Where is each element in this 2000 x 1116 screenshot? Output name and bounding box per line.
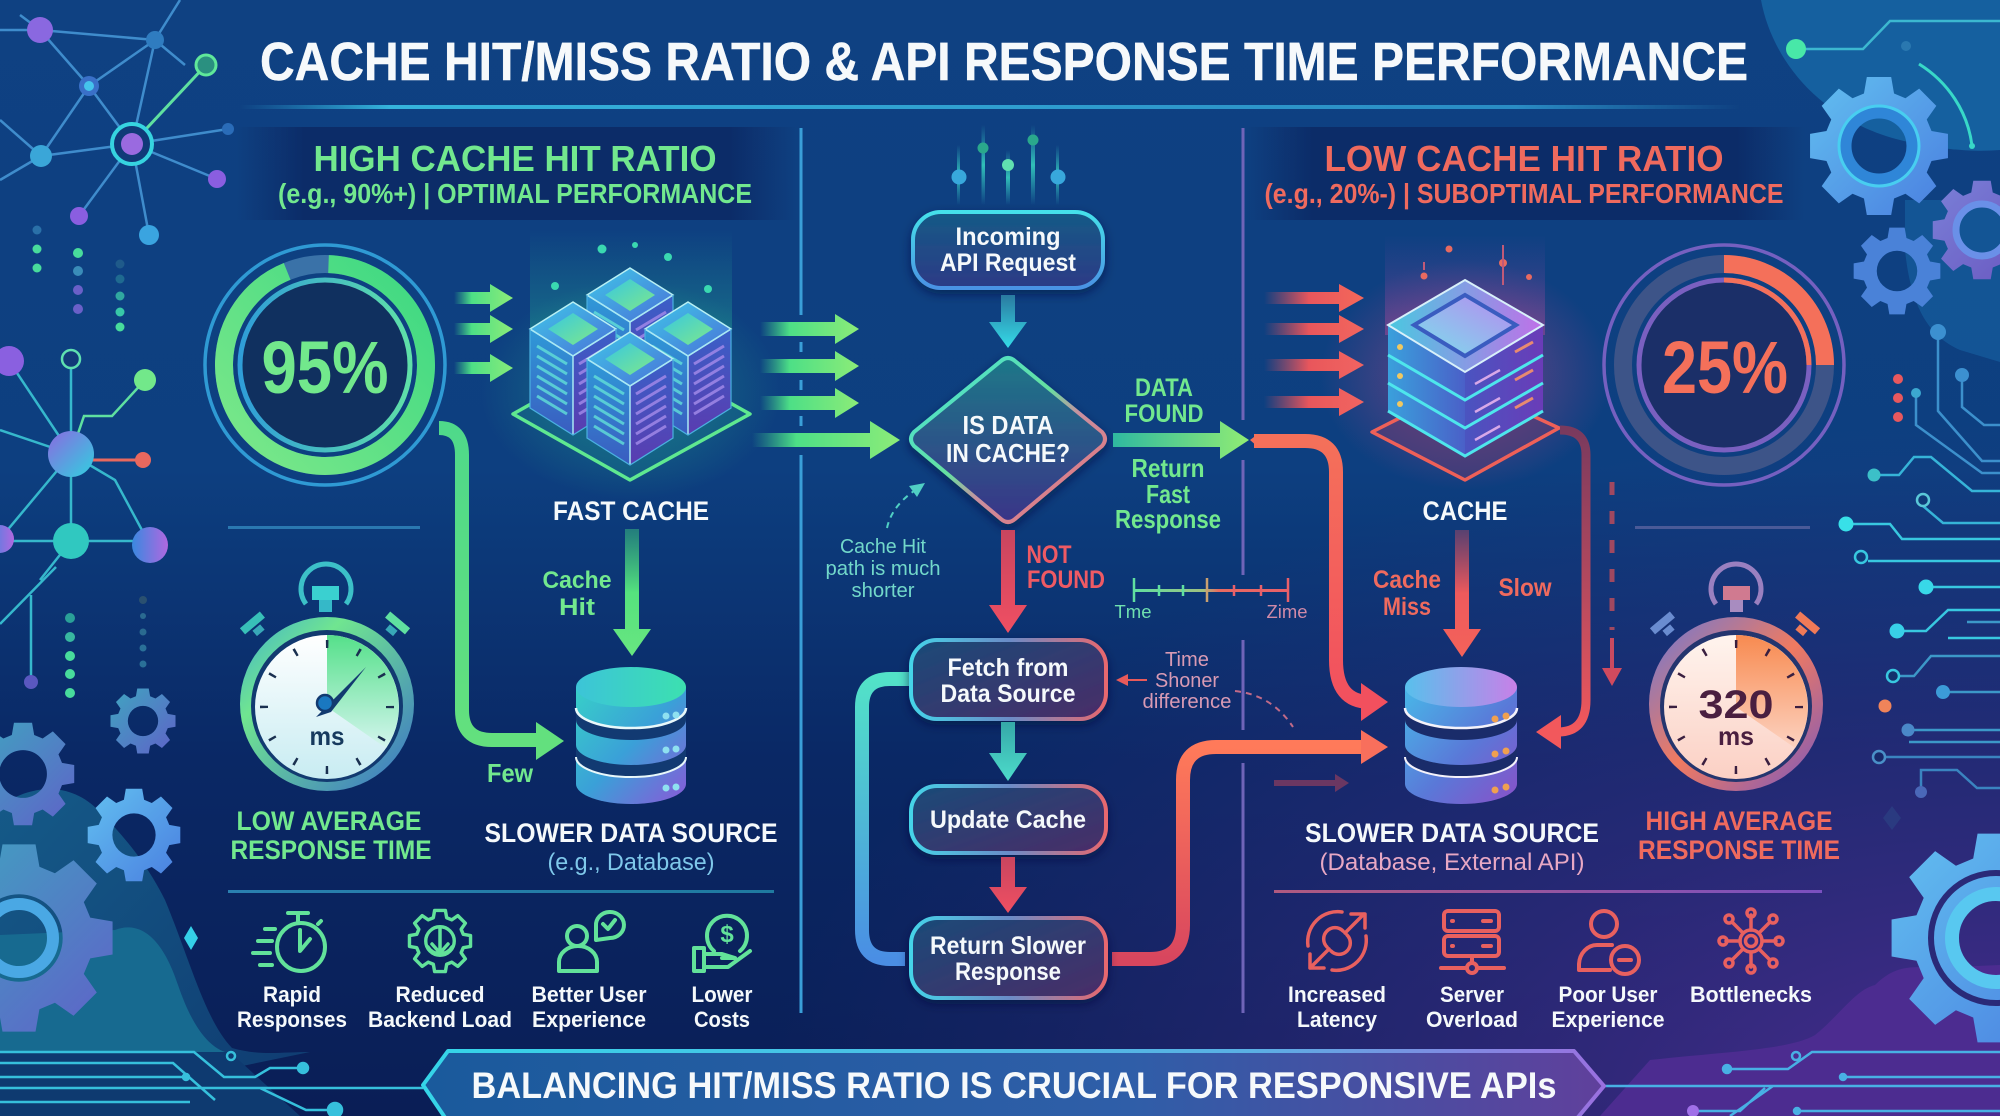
arrow: update to return — [989, 857, 1027, 913]
impact: increased latency: Latency — [1297, 1007, 1378, 1032]
label: data found: DATA — [1135, 374, 1193, 402]
banner: key takeaway: BALANCING HIT/MISS RATIO IS CRUCIAL FOR RESPONSIVE APIs — [472, 1065, 1556, 1106]
label: return fast response: Fast — [1146, 479, 1190, 509]
label: not found: FOUND — [1027, 566, 1105, 594]
icon: fast cache servers — [481, 230, 781, 500]
decor: right circuit lines — [1838, 324, 2000, 830]
arrows: into cache — [1264, 284, 1364, 416]
arrow: request to decision — [989, 295, 1027, 348]
impact: server overload: Overload — [1426, 1007, 1518, 1032]
impact: poor user experience: Poor User — [1558, 982, 1658, 1007]
panel: high cache hit header — [236, 127, 798, 220]
benefit: better user experience: Better User — [532, 982, 647, 1007]
stopwatch: high average — [1649, 564, 1823, 791]
arrow: data found — [1113, 421, 1249, 459]
icon: server rack — [1441, 911, 1504, 973]
flow box: return slower response — [911, 918, 1106, 998]
arrow: dashed slow path — [1602, 482, 1622, 686]
label: slow: Slow — [1498, 574, 1552, 602]
label: high average response time: HIGH AVERAGE — [1646, 806, 1832, 836]
benefit: lower costs: Lower — [692, 982, 753, 1007]
note: cache hit path is much shorter: path is much — [826, 558, 940, 580]
arrow: fast response to data source — [1250, 434, 1388, 721]
impact: increased latency: Increased — [1288, 982, 1386, 1007]
arrows: into fast cache — [454, 284, 513, 382]
flow box: incoming API request — [913, 212, 1103, 288]
note: cache hit path is much shorter — [826, 483, 940, 602]
label: cache hit: Hit — [559, 594, 595, 621]
note: time difference: Shoner — [1155, 670, 1219, 692]
icon: cache stack — [1320, 235, 1610, 490]
impact: poor user experience: Experience — [1552, 1007, 1664, 1032]
benefit: reduced backend load — [368, 910, 512, 1032]
impact: server overload — [1426, 911, 1518, 1032]
impact: bottlenecks: Bottlenecks — [1690, 982, 1812, 1007]
flow box: fetch from data source: Data Source — [940, 680, 1076, 708]
decor: top-left network — [0, 0, 234, 245]
decor: mid-left network — [0, 346, 168, 689]
label: high average response time: RESPONSE TIME — [1638, 835, 1840, 865]
icon: left data source — [576, 667, 686, 804]
column divider: left — [800, 128, 802, 1013]
arrow: cache miss — [1443, 530, 1481, 657]
decor: dot columns — [32, 226, 147, 698]
label: data found: FOUND — [1124, 400, 1204, 428]
left benefits divider — [228, 890, 774, 893]
label: cache miss — [1373, 566, 1441, 621]
panel: low cache hit header — [1245, 127, 1805, 220]
timeline: Tme — [1114, 602, 1152, 622]
note: cache hit path is much shorter: Cache Hit — [840, 536, 926, 558]
benefit: lower costs: Costs — [694, 1007, 750, 1032]
impact: increased latency — [1288, 912, 1386, 1032]
label: low average response time: LOW AVERAGE — [236, 806, 422, 836]
panel: low cache hit header: (e.g., 20%-) | SUBOPTIMAL PERFORMANCE — [1264, 178, 1784, 209]
label: return fast response — [1115, 453, 1221, 534]
icon: coin in hand: $ — [720, 921, 734, 948]
label: data found — [1124, 374, 1204, 428]
column divider: right — [1242, 128, 1244, 1013]
stopwatch: high average: ms — [1718, 721, 1754, 751]
impact: server overload: Server — [1440, 982, 1504, 1007]
flow box: return slower response: Response — [955, 958, 1061, 986]
flow box: incoming API request: Incoming — [956, 223, 1060, 251]
impact: bottlenecks — [1690, 909, 1812, 1007]
flow box: update cache: Update Cache — [930, 806, 1086, 834]
stopwatch: low average: ms — [310, 721, 344, 751]
benefit: rapid responses: Rapid — [263, 982, 321, 1007]
arrows: fast cache outgoing — [752, 314, 900, 459]
impact: poor user experience — [1552, 911, 1664, 1032]
label: not found: NOT — [1026, 541, 1072, 569]
banner: key takeaway — [423, 1051, 1604, 1116]
icon: hub and spokes — [1719, 909, 1783, 973]
gauge: 95 percent hit ratio: 95% — [262, 326, 388, 409]
short divider right — [1635, 526, 1810, 529]
icon: right data source — [1405, 667, 1517, 804]
label: slower data source left: (e.g., Database) — [548, 849, 714, 876]
icon: gear with down arrow — [409, 910, 471, 972]
title: CACHE HIT/MISS RATIO & API RESPONSE TIME PERFORMANCE — [260, 32, 1748, 92]
right impacts divider — [1274, 890, 1822, 893]
panel: high cache hit header: (e.g., 90%+) | OPTIMAL PERFORMANCE — [278, 178, 752, 209]
benefit: lower costs — [692, 916, 753, 1032]
benefit: reduced backend load: Backend Load — [368, 1007, 512, 1032]
gauge: 25 percent hit ratio: 25% — [1662, 326, 1788, 409]
flow box: return slower response: Return Slower — [930, 932, 1086, 960]
flow box: fetch from data source — [911, 640, 1106, 719]
short divider left — [228, 526, 420, 529]
label: slower data source left: SLOWER DATA SOURCE — [484, 818, 778, 848]
decision: is data in cache: IN CACHE? — [946, 438, 1070, 468]
icon: user with minus — [1579, 911, 1639, 974]
benefit: reduced backend load: Reduced — [396, 982, 484, 1007]
gauge: 25 percent hit ratio — [1604, 245, 1844, 485]
benefit: better user experience — [532, 912, 647, 1032]
flow box: fetch from data source: Fetch from — [948, 654, 1068, 682]
label: not found — [1026, 541, 1105, 594]
timeline: Zime — [1266, 602, 1308, 622]
arrow: return slower to data source — [1112, 730, 1388, 959]
stopwatch: high average: 320 — [1698, 683, 1774, 727]
decor: top-right gears and circuit — [1786, 21, 2000, 314]
note: cache hit path is much shorter: shorter — [852, 580, 915, 602]
label: slower data source right: (Database, External API) — [1320, 849, 1584, 876]
panel: high cache hit header: HIGH CACHE HIT RATIO — [314, 138, 716, 179]
benefit: rapid responses: Responses — [237, 1007, 347, 1032]
decor: request signal lines — [952, 125, 1066, 205]
label: high average response time — [1638, 806, 1840, 865]
label: cache: CACHE — [1422, 496, 1508, 526]
arrow: faded lower path — [1274, 774, 1349, 792]
gauge: 95 percent hit ratio — [205, 245, 445, 485]
decision: is data in cache: IS DATA — [962, 410, 1054, 440]
decision: is data in cache — [911, 358, 1105, 522]
label: return fast response: Return — [1132, 453, 1204, 483]
label: cache hit: Cache — [542, 567, 612, 594]
stopwatch: low average — [240, 564, 414, 791]
decor: left gears — [0, 688, 198, 1032]
flow box: update cache — [911, 786, 1106, 853]
label: cache hit — [542, 567, 612, 621]
arrow: cache base to data source — [1536, 430, 1586, 749]
arrow: not found — [989, 530, 1027, 633]
decor: bottom-left circuit — [0, 1052, 423, 1116]
panel: low cache hit header: LOW CACHE HIT RATIO — [1324, 138, 1724, 179]
icon: stopwatch — [253, 913, 325, 971]
label: low average response time — [230, 806, 432, 865]
benefit: rapid responses — [237, 913, 347, 1032]
benefit: better user experience: Experience — [532, 1007, 646, 1032]
label: fast cache: FAST CACHE — [553, 496, 709, 526]
arrow: cache hit — [613, 529, 651, 656]
flow box: incoming API request: API Request — [940, 249, 1077, 277]
label: slower data source left — [484, 818, 778, 876]
timeline — [1114, 578, 1308, 622]
icon: diverging arrows — [1308, 912, 1366, 970]
arrow: fetch to update — [989, 722, 1027, 781]
note: time difference — [1116, 649, 1293, 727]
arrow: few misses to data source — [439, 428, 564, 760]
decor: bottom-right gear — [1892, 834, 2000, 1042]
loop: fetch to return — [862, 679, 911, 959]
label: few: Few — [487, 758, 534, 788]
icon: user with check bubble — [559, 912, 624, 971]
note: time difference: Time — [1165, 649, 1209, 671]
label: slower data source right: SLOWER DATA SOURCE — [1305, 818, 1599, 848]
label: low average response time: RESPONSE TIME — [230, 835, 432, 865]
label: cache miss: Miss — [1383, 593, 1431, 621]
label: cache miss: Cache — [1373, 566, 1441, 594]
note: time difference: difference — [1142, 691, 1232, 713]
label: slower data source right — [1305, 818, 1599, 876]
label: return fast response: Response — [1115, 504, 1221, 534]
decor: bottom-right circuit — [1604, 1052, 2000, 1116]
